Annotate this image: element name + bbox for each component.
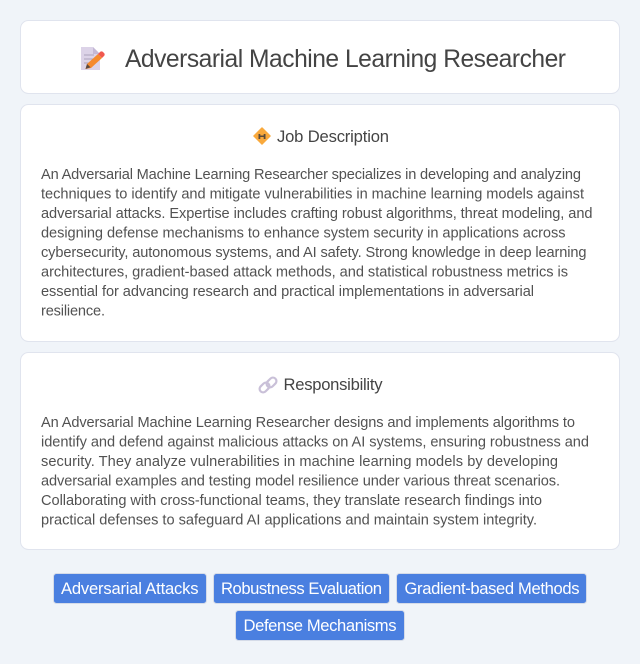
text block: job description xyxy=(41,167,592,320)
panel: title xyxy=(20,20,620,94)
heading: job description: Job Description xyxy=(277,127,389,146)
text block: responsibility: practical defenses to safeguard AI applications and maintain system integrity. xyxy=(41,512,537,528)
text block: responsibility: adversarial examples and testing model resilience under various threat scenarios. xyxy=(41,474,560,490)
tag: Defense Mechanisms xyxy=(236,610,404,640)
tag: Robustness Evaluation xyxy=(214,574,390,604)
text block: job description: adversarial attacks. Expertise includes crafting robust algorithms, threat modeling, and xyxy=(41,206,592,222)
text block: responsibility: An Adversarial Machine Learning Researcher designs and implements algorithms to xyxy=(41,415,575,431)
tag: Adversarial Attacks: Adversarial Attacks xyxy=(61,579,198,598)
text block: job description: cybersecurity, autonomous systems, and AI safety. Strong knowledge in deep learning xyxy=(41,245,586,261)
tag: Robustness Evaluation: Robustness Evaluation xyxy=(221,579,382,598)
text block: responsibility: security. They analyze vulnerabilities in machine learning models by developing xyxy=(41,454,558,470)
tag: Adversarial Attacks xyxy=(54,574,206,604)
text block: job description: designing defense mechanisms to enhance system security in applications across xyxy=(41,226,566,242)
text block: job description: architectures, gradient-based attack methods, and statistical robustness metrics is xyxy=(41,264,568,280)
text block: responsibility: Collaborating with cross-functional teams, they translate research findings into xyxy=(41,493,542,509)
panel: job description xyxy=(20,104,620,342)
icon: document with pencil xyxy=(81,47,105,70)
heading: responsibility: Responsibility xyxy=(284,375,383,394)
text block: job description: An Adversarial Machine Learning Researcher specializes in developing and analyzing xyxy=(41,167,581,183)
icon: diamond sign xyxy=(254,128,270,144)
icon: chain link xyxy=(258,376,278,394)
text block: job description: techniques to identify and mitigate vulnerabilities in machine learning models against xyxy=(41,186,584,202)
text block: job description: resilience. xyxy=(41,304,105,320)
tag: Gradient-based Methods xyxy=(396,574,586,604)
title text: Adversarial Machine Learning Researcher xyxy=(125,46,566,73)
text block: job description: essential for advancing research and practical implementations in adversarial xyxy=(41,284,534,300)
panel: responsibility xyxy=(20,352,620,550)
tag: Defense Mechanisms: Defense Mechanisms xyxy=(244,616,396,635)
tag: Gradient-based Methods: Gradient-based Methods xyxy=(404,579,580,598)
text block: responsibility: identify and defend against malicious attacks on AI systems, ensuring robustness and xyxy=(41,434,589,450)
text block: responsibility xyxy=(41,415,589,528)
